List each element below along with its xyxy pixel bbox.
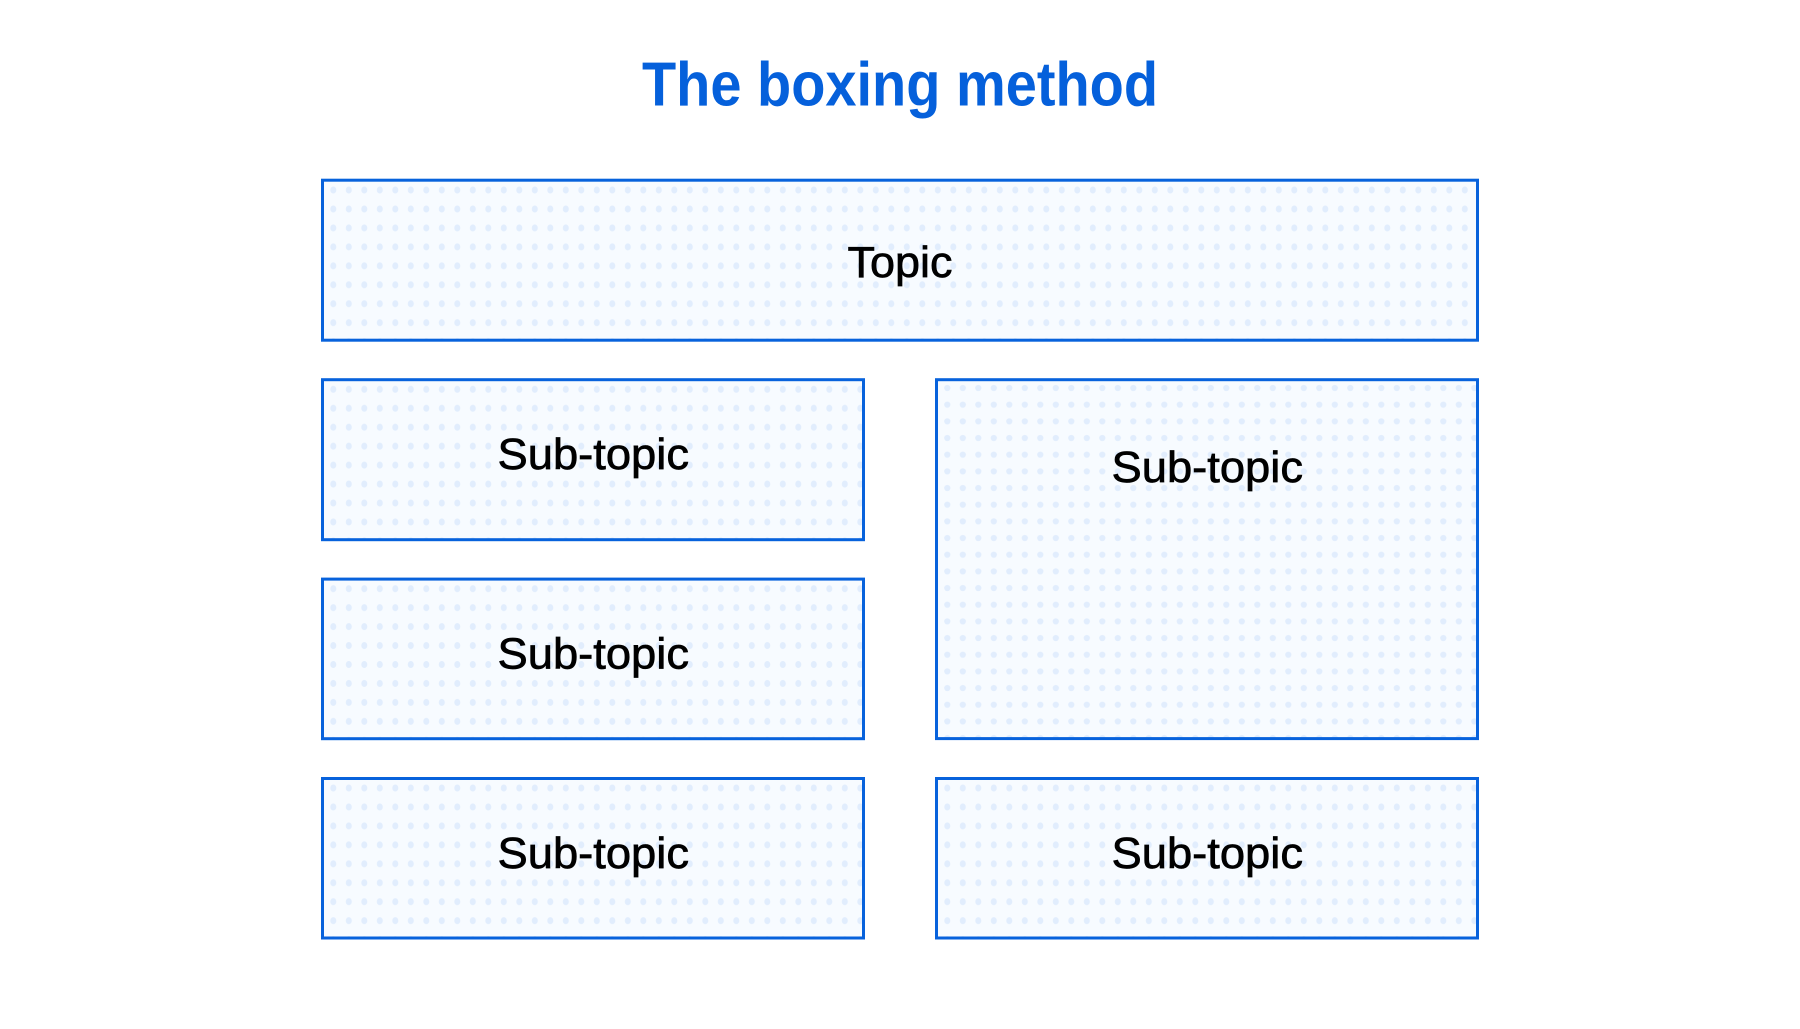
panel: sub-topic left 3: [322, 778, 864, 938]
panel: sub-topic right tall: [936, 380, 1478, 739]
label: sub-topic left 2: Sub-topic: [498, 630, 689, 678]
panel: topic: [322, 180, 1478, 340]
panel: sub-topic left 1: [322, 380, 864, 540]
panel: sub-topic right bottom: [936, 778, 1478, 938]
label: topic: Topic: [848, 238, 952, 287]
label: sub-topic right bottom: Sub-topic: [1112, 829, 1303, 878]
panel: sub-topic left 2: [322, 579, 864, 739]
label: sub-topic right tall: Sub-topic: [1112, 443, 1303, 492]
title: The boxing method: [642, 50, 1158, 120]
label: sub-topic left 3: Sub-topic: [498, 829, 689, 878]
label: sub-topic left 1: Sub-topic: [498, 430, 689, 479]
